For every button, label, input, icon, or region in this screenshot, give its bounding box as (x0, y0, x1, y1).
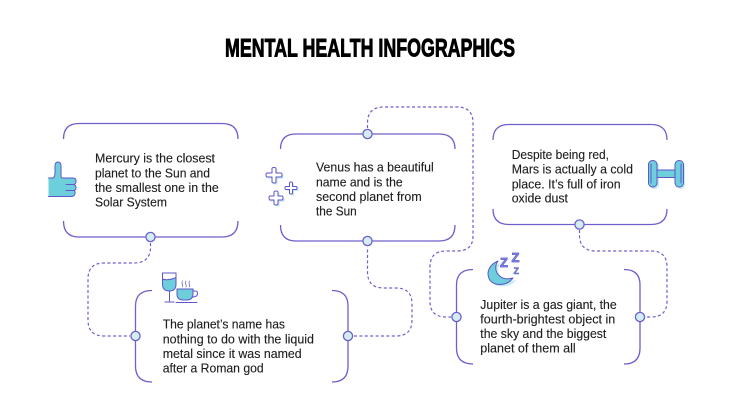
panel: Mars (493, 124, 685, 229)
icon: thumbs up (48, 162, 76, 196)
connector node (146, 232, 155, 242)
text: Venus: the Sun (316, 204, 357, 218)
connector node left (131, 331, 140, 341)
connector: planet name panel to Venus (354, 247, 412, 336)
text: Venus: second planet from (316, 190, 422, 204)
connector node right (635, 312, 645, 322)
text: Mars: Despite being red, (512, 148, 609, 162)
text: planet name: metal since it was named (163, 347, 302, 361)
text: Mars: Mars is actually a cold (512, 163, 633, 177)
icon: moon and sleep letters: Z (512, 250, 520, 265)
text: Mercury: Mercury is the closest (95, 152, 215, 166)
icon: moon and sleep letters: Z (500, 255, 508, 270)
icon: sparkles (266, 168, 298, 206)
text: planet name (163, 318, 314, 376)
text: Mercury: Solar System (95, 196, 167, 210)
text: Jupiter: planet of them all (480, 342, 576, 356)
text: planet name: The planet’s name has (163, 318, 285, 332)
text: Jupiter (480, 298, 617, 356)
text: Mercury: planet to the Sun and (95, 166, 210, 180)
panel: Jupiter (452, 250, 645, 364)
text: Venus (316, 161, 434, 218)
icon: wine glass and coffee cup (162, 273, 198, 302)
text: Jupiter: fourth-brightest object in (480, 313, 615, 327)
title: MENTAL HEALTH INFOGRAPHICS (225, 34, 515, 62)
text: Mars: oxide dust (512, 192, 568, 206)
icon: dumbbell (648, 160, 685, 189)
panel: planet name (131, 273, 353, 382)
text: Jupiter: the sky and the biggest (480, 327, 607, 341)
connector: Mercury to planet name panel (88, 243, 150, 336)
text: planet name: nothing to do with the liquid (163, 332, 314, 346)
panel: Venus (266, 129, 455, 246)
text: Mercury (95, 152, 219, 210)
text: Mars: place. It’s full of iron (512, 177, 621, 191)
text: Venus: name and is the (316, 175, 403, 189)
connector: Venus to Jupiter (368, 107, 473, 317)
connector node left (452, 312, 461, 322)
connector node top (363, 129, 372, 139)
text: Venus: Venus has a beautiful (316, 161, 434, 175)
connector node right (343, 331, 353, 341)
connector node (575, 220, 584, 229)
panel: Mercury (48, 124, 238, 242)
text: Mercury: the smallest one in the (95, 181, 219, 195)
text: Jupiter: Jupiter is a gas giant, the (480, 298, 617, 312)
connector node bottom (363, 236, 372, 246)
text: planet name: after a Roman god (163, 362, 264, 376)
text: Mars (512, 148, 633, 206)
connector: Mars to Jupiter (580, 230, 667, 317)
icon: moon and sleep letters (488, 250, 520, 287)
icon: moon and sleep letters: Z (514, 266, 520, 276)
